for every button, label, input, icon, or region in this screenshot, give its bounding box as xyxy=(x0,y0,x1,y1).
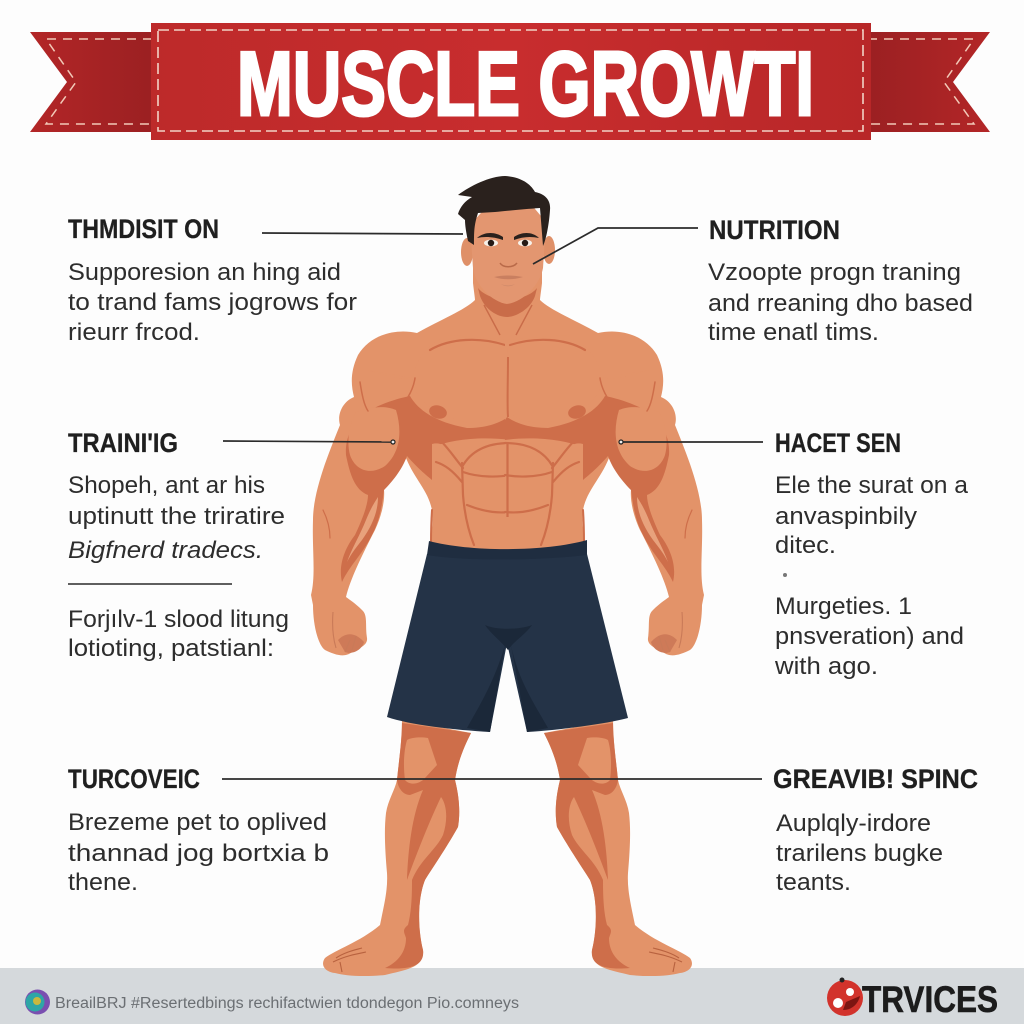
text block: top right xyxy=(708,215,973,346)
tail stitching xyxy=(46,39,974,124)
text block: bottom right: teants. xyxy=(776,869,851,896)
right ribbon tail xyxy=(868,32,990,132)
text block: top right: time enatl tims. xyxy=(708,319,879,346)
text block: middle right: ditec. xyxy=(775,532,836,559)
text block: bottom right: Auplqly-irdore xyxy=(776,810,931,837)
text block: top left: Supporesion an hing aid xyxy=(68,259,341,286)
footer text: BreailBRJ #Resertedbings rechifactwien tdondegon Pio.comneys xyxy=(55,995,519,1012)
text block: middle left: Bigfnerd tradecs. xyxy=(68,537,263,564)
eyes xyxy=(484,240,498,246)
left ribbon tail xyxy=(30,32,152,132)
text block: bottom left: TURCOVEIC xyxy=(68,764,200,794)
text block: middle right: with ago. xyxy=(774,653,878,680)
text block: top right: NUTRITION xyxy=(709,215,840,245)
text block: middle left: lotioting, patstianl: xyxy=(68,635,274,662)
waistband xyxy=(427,540,587,560)
eyebrows xyxy=(477,233,503,240)
text block: middle right xyxy=(774,428,968,680)
text block: bottom right xyxy=(773,764,978,896)
banner main xyxy=(151,23,871,140)
body left half xyxy=(311,262,510,976)
head xyxy=(458,176,555,335)
text block: top left xyxy=(68,214,357,346)
text block: middle right: pnsveration) and xyxy=(775,623,964,650)
center chest line xyxy=(507,357,509,417)
shorts xyxy=(387,540,628,732)
figure: muscular man xyxy=(311,176,704,976)
footer bar xyxy=(0,968,1024,1024)
title banner xyxy=(30,23,990,140)
text block: bottom right: trarilens bugke xyxy=(776,840,943,867)
text block: middle left: Shopeh, ant ar his xyxy=(68,472,265,499)
body right half xyxy=(505,262,704,976)
text block: top left: THMDISIT ON xyxy=(68,214,219,244)
text block: bottom left: thene. xyxy=(68,869,138,896)
hair xyxy=(458,176,550,246)
text block: top right: Vzoopte progn traning xyxy=(708,259,961,286)
text block: middle left xyxy=(68,428,289,662)
ears xyxy=(461,238,473,266)
text block: bottom right: GREAVIB! SPINC xyxy=(773,764,978,794)
nose and mouth xyxy=(500,263,517,267)
text block: top right: and rreaning dho based xyxy=(708,290,973,317)
text block: top left: rieurr frcod. xyxy=(68,319,200,346)
text block: middle right: Murgeties. 1 xyxy=(775,593,912,620)
text block: middle right: Ele the surat on a xyxy=(775,472,968,499)
face xyxy=(470,203,546,304)
footer logo: TRVICES xyxy=(862,979,998,1020)
text block: bottom left: thannad jog bortxia b xyxy=(68,840,329,867)
footer logo xyxy=(827,978,998,1020)
neck shadow xyxy=(478,288,537,317)
text block: middle left: TRAINI'IG xyxy=(68,428,178,458)
leader lines xyxy=(68,228,763,779)
text block: bottom left xyxy=(68,764,329,896)
text block: middle left: Forjılv-1 slood litung xyxy=(68,606,289,633)
text block: top left: to trand fams jogrows for xyxy=(68,289,357,316)
text block: bottom left: Brezeme pet to oplived xyxy=(68,809,327,836)
text block: middle left: uptinutt the triratire xyxy=(68,503,285,530)
footer icon xyxy=(25,990,50,1014)
text block: middle right: anvaspinbily xyxy=(775,503,918,530)
text block: middle right: HACET SEN xyxy=(775,428,901,458)
title text: MUSCLE GROWTI xyxy=(237,34,814,135)
